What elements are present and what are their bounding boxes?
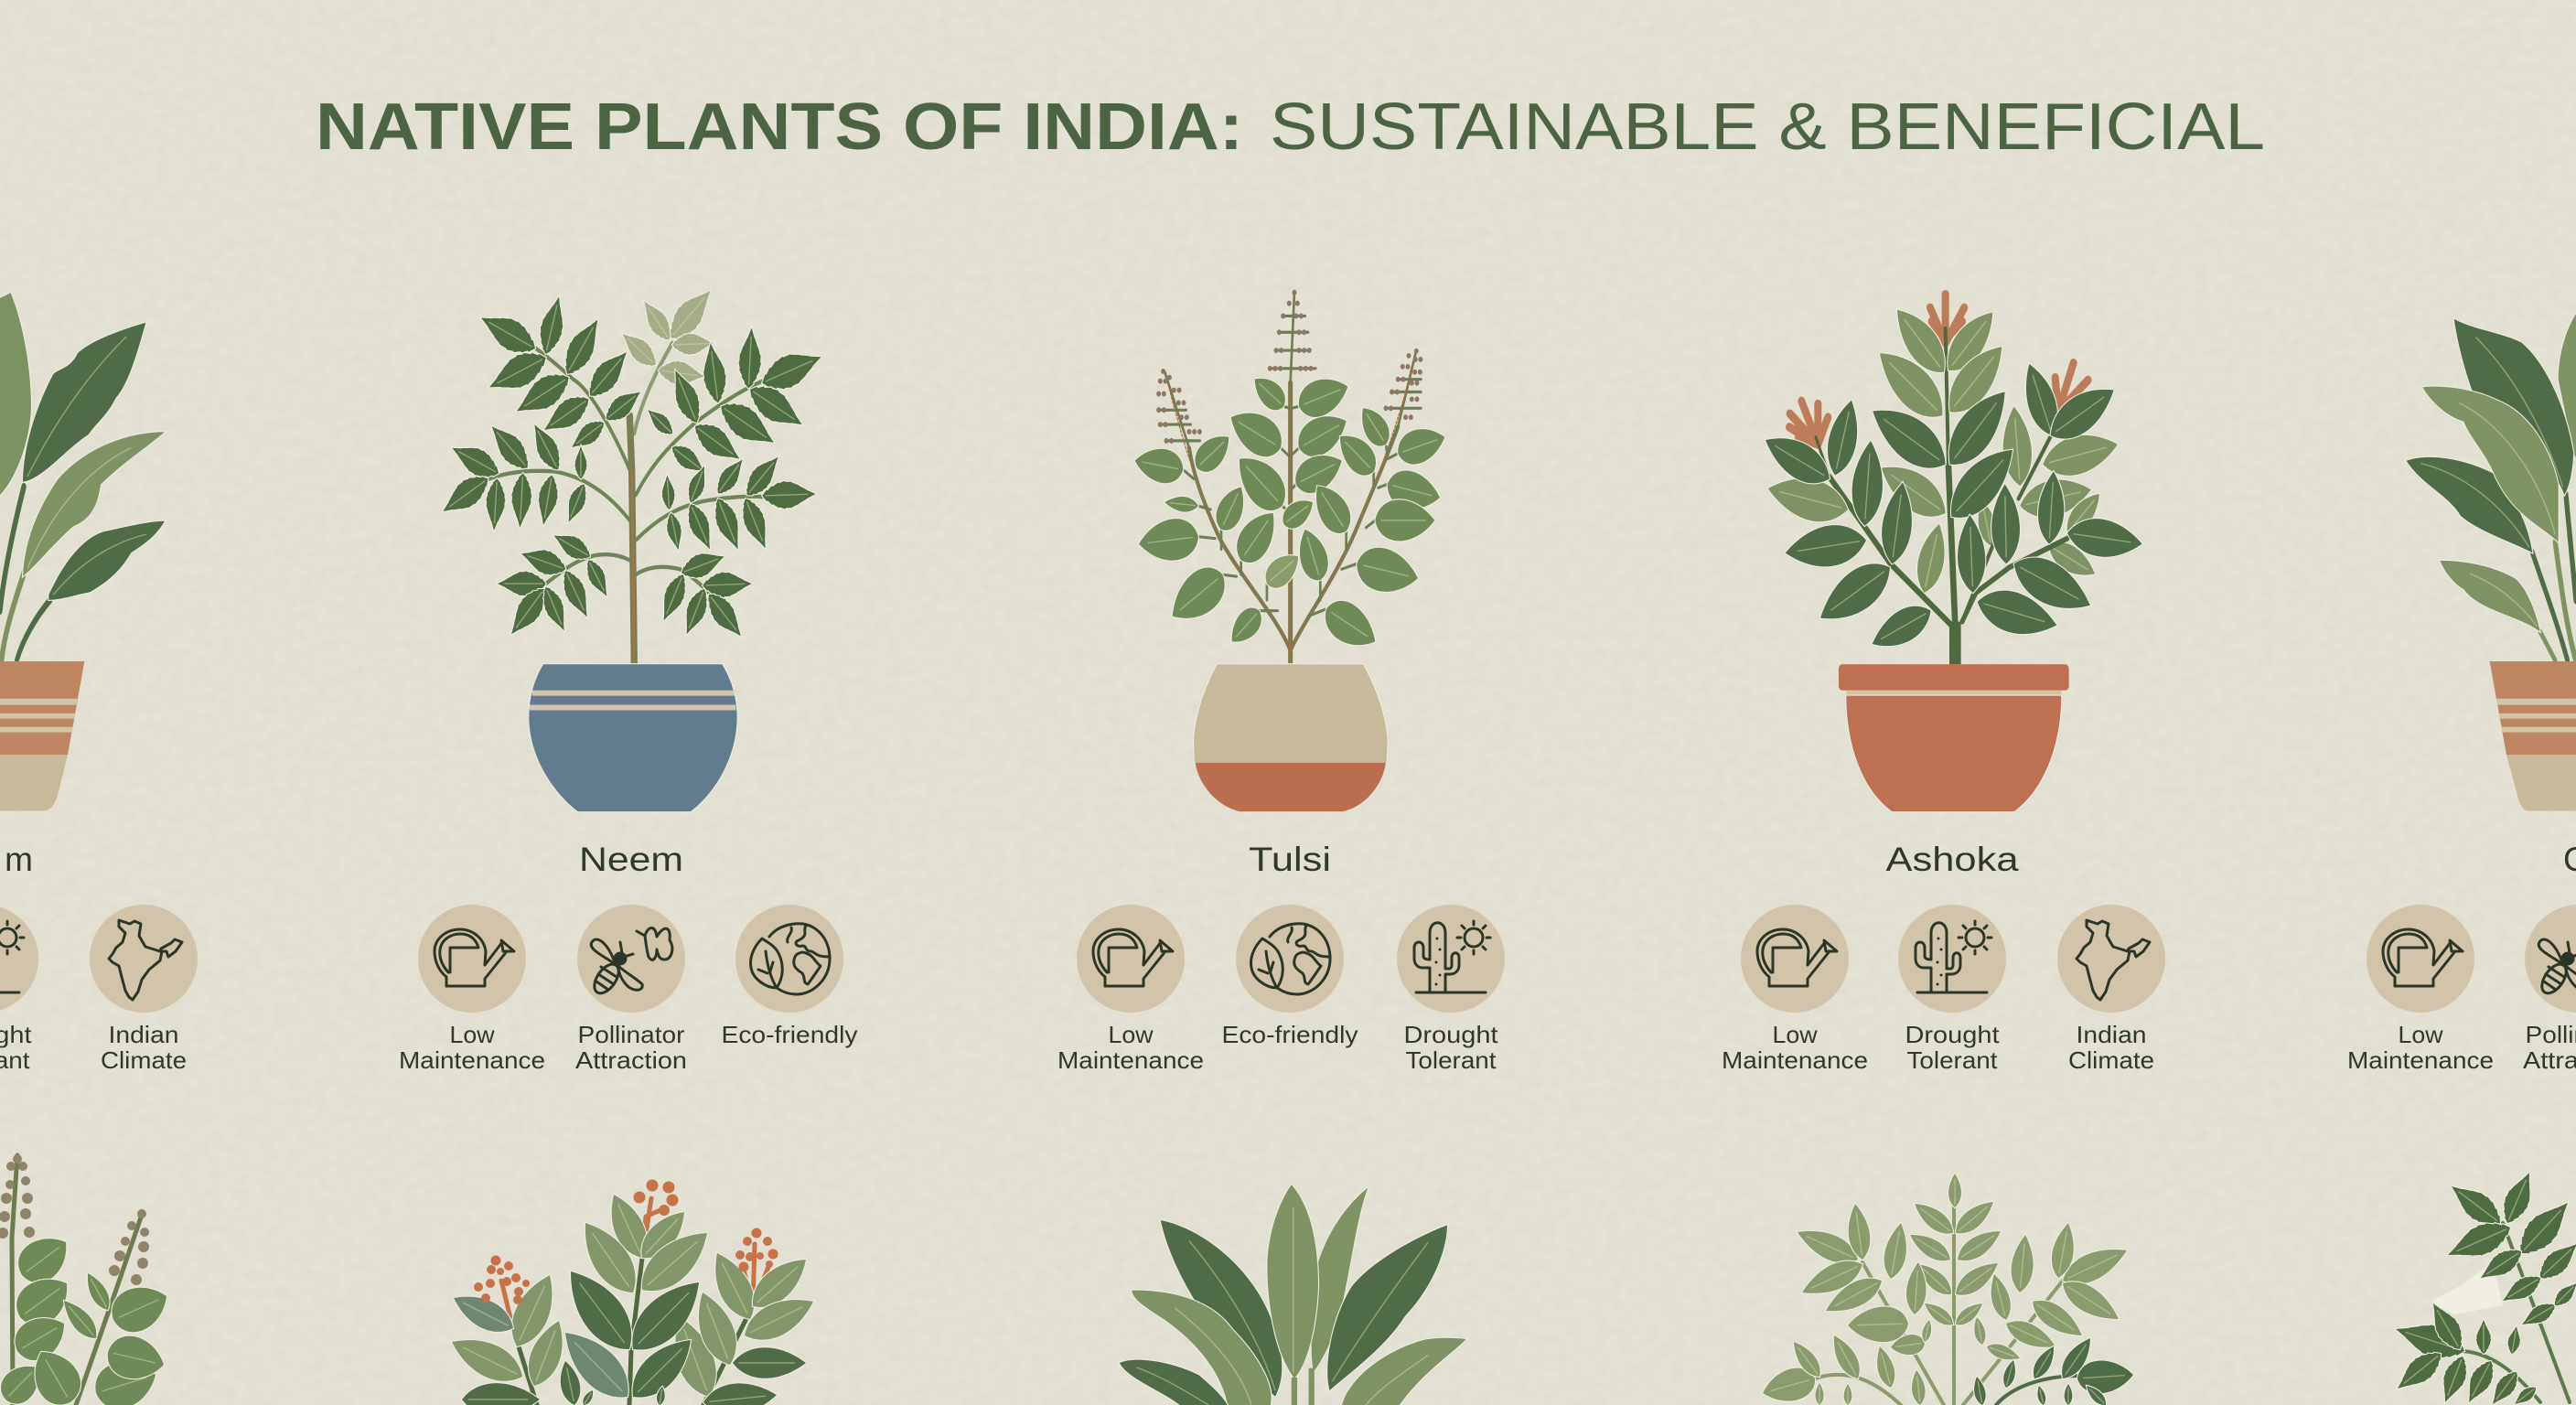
- label: low maintenance: Low: [1109, 1021, 1154, 1048]
- icon: drought tolerant: [0, 905, 38, 1013]
- label: low maintenance: Low: [2399, 1021, 2443, 1048]
- benefits: Tulsi: [1057, 905, 1505, 1074]
- title: SUSTAINABLE & BENEFICIAL: [1270, 91, 2265, 164]
- dark leaves: [1759, 359, 2144, 659]
- two-tone pot: [1194, 664, 1388, 811]
- plant: bottom row berry shrub: [445, 1180, 821, 1405]
- icon: bee and butterfly: [577, 905, 685, 1013]
- icon: watering can: [1077, 905, 1185, 1013]
- plant name: cropped left: m: [5, 841, 33, 878]
- label: eco-friendly: Eco-friendly: [1222, 1021, 1358, 1048]
- label: eco-friendly: Eco-friendly: [721, 1021, 858, 1048]
- label: low maintenance: Low: [450, 1021, 495, 1048]
- label: Indian climate: Climate: [101, 1046, 187, 1074]
- label: drought tolerant: Drought: [1403, 1021, 1498, 1048]
- label: low maintenance: Maintenance: [1057, 1046, 1204, 1074]
- label: Indian climate: Indian: [108, 1021, 179, 1048]
- benefits: cropped right plant: [2347, 905, 2576, 1074]
- pale tear in artwork: [2431, 1262, 2503, 1314]
- benefits: cropped left plant: [0, 905, 198, 1074]
- label: low maintenance: Maintenance: [1722, 1046, 1868, 1074]
- plant name: Tulsi: Tulsi: [1249, 841, 1331, 878]
- light back leaves: [1873, 405, 2107, 596]
- label: low maintenance: Maintenance: [2347, 1046, 2494, 1074]
- icon: cactus and sun: [1898, 905, 2006, 1013]
- plant: Tulsi: [1132, 293, 1449, 811]
- icon: watering can: [2367, 905, 2474, 1013]
- stems: [485, 347, 766, 664]
- pale top leaves: [617, 280, 719, 434]
- label: drought tolerant: Tolerant: [1906, 1046, 1998, 1074]
- tulsi leaves: [1132, 370, 1449, 659]
- icon: globe and leaf: [735, 905, 843, 1013]
- plant: cropped right broad-leaf plant: [2407, 314, 2576, 811]
- icon: India map: [90, 905, 198, 1013]
- label: Indian climate: Climate: [2068, 1046, 2154, 1074]
- icon: India map: [2057, 905, 2165, 1013]
- plant: bottom row neem, cropped right: [2390, 1168, 2576, 1405]
- plant: Ashoka: [1759, 295, 2144, 811]
- terracotta pot: [1839, 664, 2069, 811]
- label: low maintenance: Low: [1773, 1021, 1818, 1048]
- label: low maintenance: Maintenance: [399, 1046, 545, 1074]
- icon: watering can: [1741, 905, 1849, 1013]
- icon: globe and leaf: [1236, 905, 1344, 1013]
- blue pot: [529, 664, 737, 811]
- icon: cactus and sun: [1397, 905, 1505, 1013]
- plant name: Neem: Neem: [579, 841, 683, 878]
- benefits: Ashoka: [1722, 905, 2165, 1074]
- neem leaves: [437, 294, 826, 645]
- label: drought tolerant: Drought: [1905, 1021, 2000, 1048]
- icon: bee and butterfly: [2525, 905, 2576, 1013]
- stems: [1159, 293, 1421, 664]
- plant: bottom row spike plant, cropped left: [0, 1154, 176, 1405]
- upper and side leaves: [1765, 298, 2121, 530]
- stems: [1816, 328, 2067, 664]
- plant name: Ashoka: Ashoka: [1886, 841, 2019, 878]
- label: pollinator attraction: Pollinator: [578, 1021, 685, 1048]
- benefits: Neem: [399, 905, 858, 1074]
- plant: bottom row broad strap-leaf plant: [1120, 1185, 1466, 1405]
- plant: cropped left broad-leaf plant: [0, 293, 165, 811]
- label: pollinator attraction: Attraction: [575, 1046, 687, 1074]
- flower spikes: [1159, 293, 1422, 441]
- plant: Neem: [437, 280, 826, 811]
- title: NATIVE PLANTS OF INDIA:: [316, 91, 1243, 164]
- plant: bottom row fine-leaf plant: [1758, 1174, 2134, 1405]
- flowers: [1789, 295, 2088, 445]
- icon: watering can: [418, 905, 526, 1013]
- label: drought tolerant: Tolerant: [1405, 1046, 1497, 1074]
- label: Indian climate: Indian: [2077, 1021, 2146, 1048]
